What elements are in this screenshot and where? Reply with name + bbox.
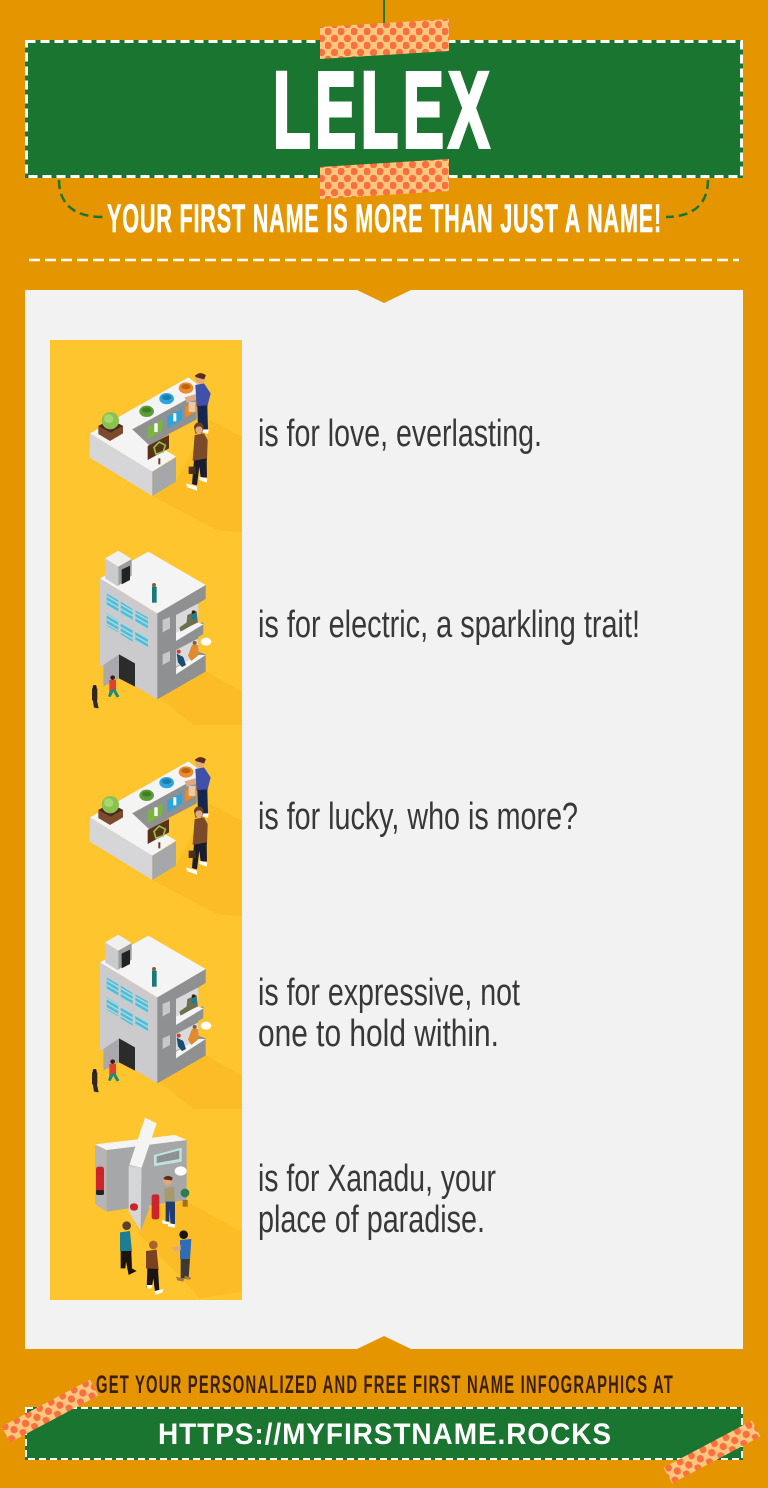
top thread [383, 0, 385, 24]
footer banner [25, 1407, 743, 1460]
panel: content [25, 290, 743, 1349]
text: E second [258, 972, 520, 1055]
text: X: place of paradise. [258, 1199, 485, 1241]
text: X [258, 1158, 496, 1241]
illustration: recycling station 2 [89, 757, 242, 917]
tape: top [320, 19, 449, 59]
tape: bottom [320, 159, 449, 199]
text: E second: one to hold within. [258, 1013, 499, 1055]
illustration: office building 1 [92, 551, 242, 725]
illustration column [50, 340, 242, 1300]
connector curve: left [59, 180, 103, 217]
text: E second: is for expressive, not [258, 972, 520, 1014]
tape: footer right [664, 1421, 760, 1483]
tape: footer left [2, 1380, 98, 1442]
illustration: X with fire extinguishers [95, 1118, 242, 1298]
text: L: is for love, everlasting. [258, 413, 542, 455]
title: LELEX [273, 49, 494, 170]
text: L second: is for lucky, who is more? [258, 796, 578, 838]
title banner [25, 40, 743, 178]
footer url: HTTPS://MYFIRSTNAME.ROCKS [158, 1418, 612, 1451]
connector curve: right [666, 180, 708, 217]
illustration: recycling station 1 [89, 373, 242, 533]
illustration: office building 2 [92, 935, 242, 1109]
text: X: is for Xanadu, your [258, 1158, 496, 1200]
text: E: is for electric, a sparkling trait! [258, 604, 640, 646]
